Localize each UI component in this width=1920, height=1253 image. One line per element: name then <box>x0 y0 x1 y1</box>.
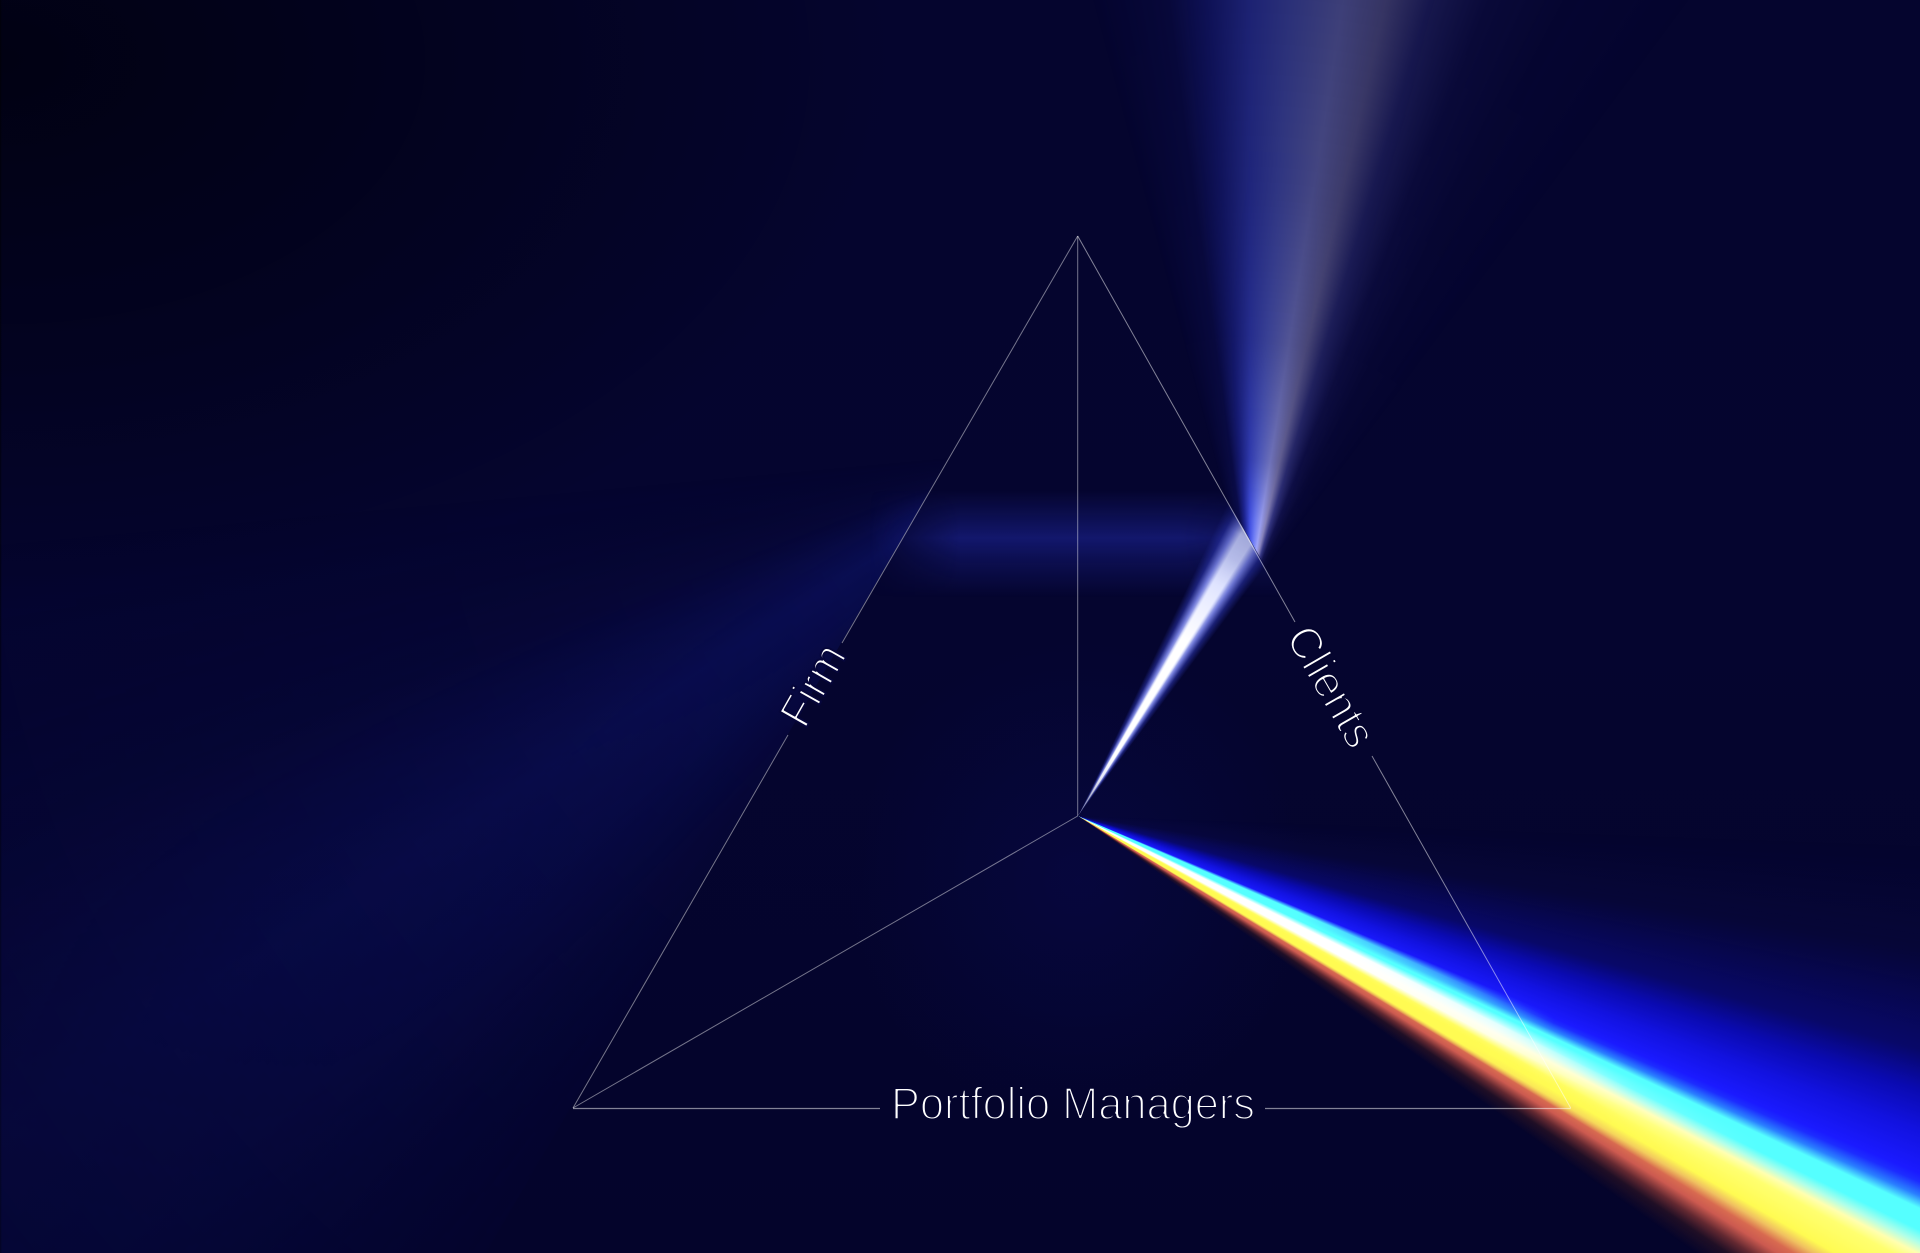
horizontal blue glow band inside prism <box>890 496 1272 588</box>
white beam halo inside prism <box>1078 506 1264 815</box>
incoming light: faint blue fan to lower left <box>0 486 932 1253</box>
white centre of spectrum beam <box>1081 818 1721 1153</box>
yellow band near the spectrum origin <box>1079 816 1664 1165</box>
cyan band near the spectrum origin <box>1080 816 1545 1023</box>
white beam core <box>1078 566 1232 815</box>
label: Clients: Clients <box>1276 616 1387 756</box>
left edge of prism <box>573 236 1078 1108</box>
right edge of prism <box>1078 236 1571 1108</box>
label: Portfolio Managers: Portfolio Managers <box>891 1078 1255 1129</box>
spectrum beam <box>1078 816 1920 1253</box>
inner edges of prism <box>573 236 1078 1108</box>
base of prism <box>573 1108 1571 1110</box>
outgoing light beam upward <box>1146 0 1507 564</box>
label: Firm: Firm <box>769 635 856 735</box>
